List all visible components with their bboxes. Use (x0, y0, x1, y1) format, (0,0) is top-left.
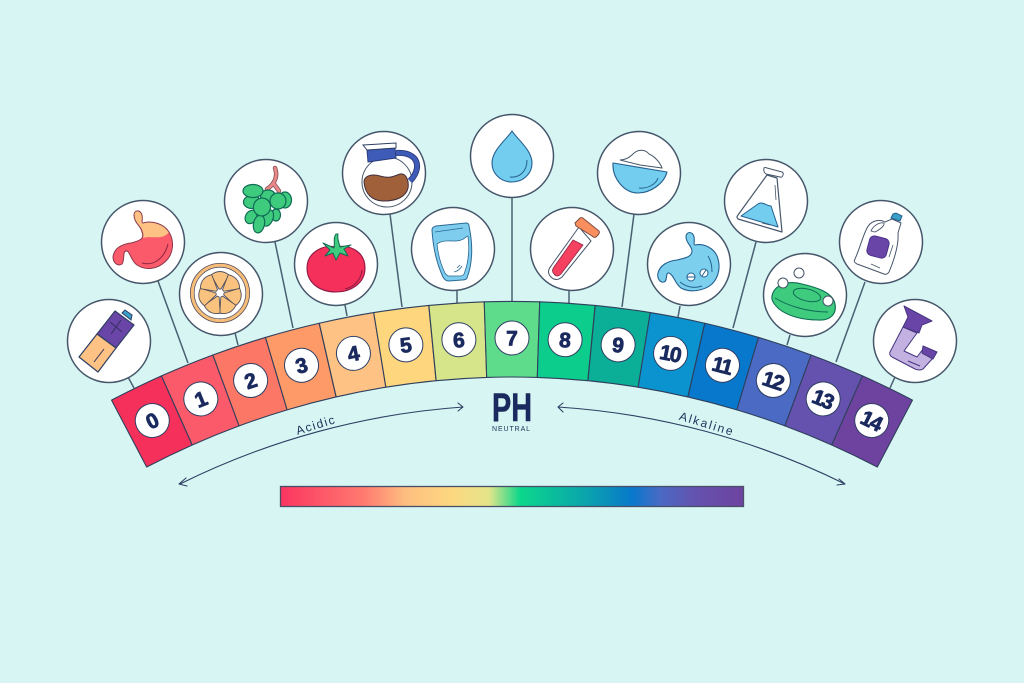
icon: coffee pot, pH 5 (342, 132, 426, 307)
icon: soap, pH 12 (764, 254, 846, 345)
segment 13 (783, 355, 863, 446)
segment 5: 5 (399, 334, 414, 358)
icon: flask, pH 11 (724, 160, 808, 328)
icon: tomato, pH 4 (294, 222, 378, 316)
segment 8 (535, 301, 595, 381)
segment 2: 2 (242, 369, 260, 394)
segment 7: 7 (506, 328, 518, 350)
segment 1: 1 (191, 387, 211, 413)
icon: test tube, pH 8 (530, 208, 614, 303)
icon: bleach bottle, pH 13 (836, 200, 922, 362)
segment 10: 10 (658, 341, 683, 368)
segment 4 (319, 312, 388, 397)
segment 9: 9 (611, 334, 625, 358)
icon: water drop, pH 7 (470, 114, 554, 301)
segment 1 (161, 355, 241, 446)
icon: glass of milk, pH 6 (412, 208, 494, 303)
segment 14 (830, 376, 913, 468)
segment 0: 0 (142, 409, 163, 434)
label: Acidic: Acidic (294, 412, 338, 438)
icon: stomach antacid, pH 10 (648, 222, 730, 317)
icon: drain pipe, pH 14 (874, 300, 956, 388)
segment 0 (111, 376, 194, 468)
segment 2 (213, 337, 289, 427)
segment 9 (586, 305, 650, 387)
segment 11 (686, 323, 759, 410)
segment 12 (735, 337, 811, 427)
label: Alkaline: Alkaline (678, 409, 736, 439)
icon: baking soda bowl, pH 9 (598, 132, 680, 307)
gradient colour bar (280, 486, 744, 506)
heading: PH: PH (492, 386, 532, 430)
segment 8: 8 (558, 329, 572, 353)
icon: battery, pH 0 (68, 300, 150, 388)
segment 13: 13 (809, 385, 837, 414)
icon: orange slice, pH 2 (180, 252, 262, 345)
pH scale arc (111, 301, 913, 468)
segment 6: 6 (452, 329, 466, 353)
segment 7 (484, 301, 540, 377)
segment 11: 11 (710, 353, 736, 380)
segment 5 (374, 305, 438, 387)
icon: stomach acid, pH 1 (102, 200, 188, 363)
segment 6 (429, 301, 489, 381)
segment 3 (265, 323, 338, 410)
segment 12: 12 (759, 367, 787, 396)
segment 4: 4 (346, 342, 362, 367)
arrow: alkaline direction (558, 403, 845, 485)
label: neutral: NEUTRAL (492, 426, 531, 433)
segment 3: 3 (293, 354, 310, 379)
arrow: acidic direction (179, 403, 463, 486)
segment 14: 14 (857, 406, 887, 437)
icon: grapes, pH 3 (224, 160, 308, 328)
segment 10 (636, 312, 705, 397)
